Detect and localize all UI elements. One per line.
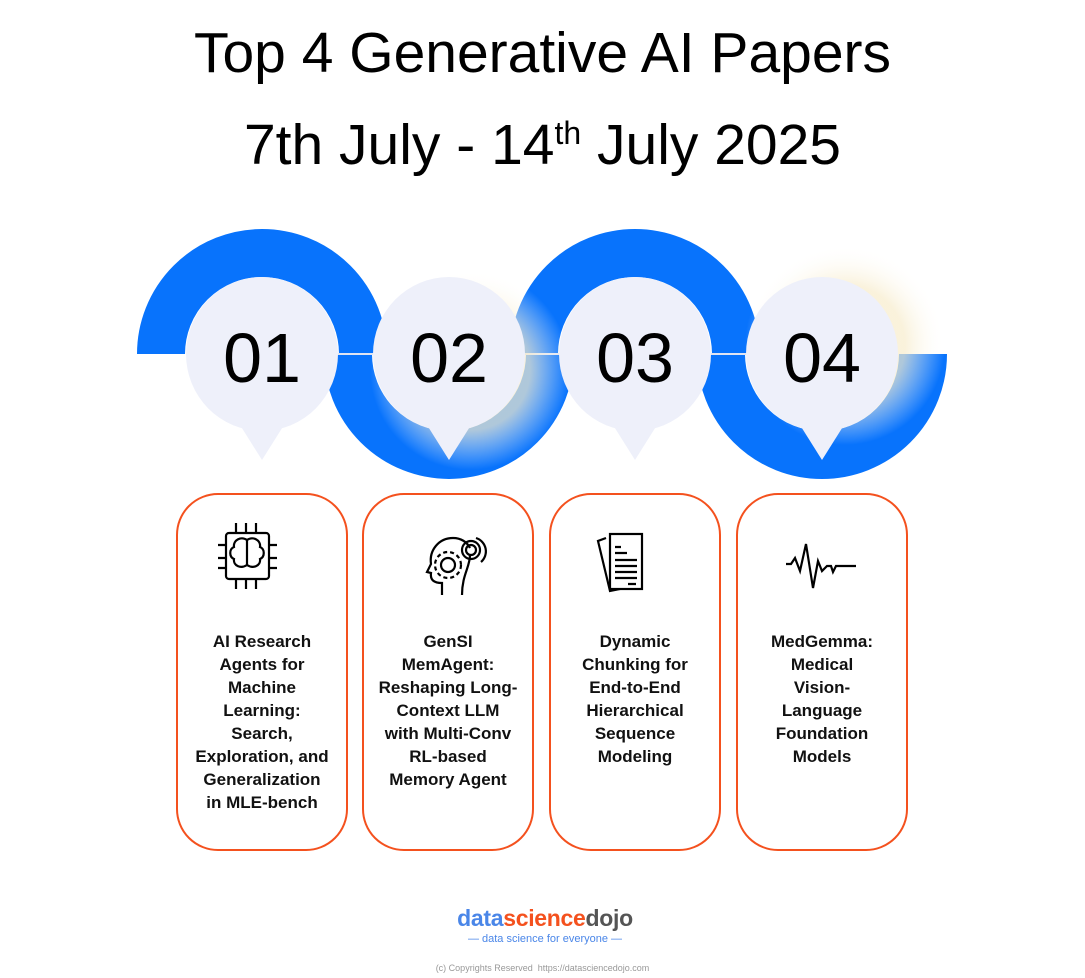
text 2: Reshaping Long- — [379, 678, 517, 697]
bubble 1 — [186, 277, 338, 460]
text 4: Vision- — [794, 678, 850, 697]
text 3: Dynamic — [600, 632, 670, 651]
logo — [457, 905, 633, 945]
text 3: Hierarchical — [586, 701, 684, 720]
text 4 — [771, 632, 873, 766]
text 2: Memory Agent — [389, 770, 507, 789]
text 3: Modeling — [598, 747, 672, 766]
number 01: 01 — [223, 319, 301, 397]
text 2: MemAgent: — [402, 655, 494, 674]
logo: — data science for everyone — — [468, 933, 622, 945]
text 1 — [195, 632, 329, 812]
text 4: Language — [782, 701, 862, 720]
text 4: Foundation — [776, 724, 868, 743]
text 3 — [582, 632, 688, 766]
bubble 2 — [373, 277, 525, 460]
icon: pulse line — [786, 544, 856, 588]
text 1: Exploration, and — [195, 747, 329, 766]
copyright: (c) Copyrights Reserved https://datasciencedojo.com — [436, 963, 649, 973]
title: Top 4 Generative AI Papers — [194, 21, 891, 85]
text 4: Models — [793, 747, 851, 766]
text 3: Chunking for — [582, 655, 688, 674]
text 4: Medical — [791, 655, 853, 674]
icons — [218, 523, 856, 595]
bubble 4 — [746, 277, 898, 460]
number 04: 04 — [783, 319, 861, 397]
text 2: GenSI — [423, 632, 473, 651]
text 2 — [379, 632, 517, 789]
text 1: Learning: — [223, 701, 301, 720]
card 3 — [549, 493, 721, 851]
bubble 3 — [559, 277, 711, 460]
text 3: End-to-End — [589, 678, 681, 697]
logo: datasciencedojo — [457, 905, 633, 931]
text 2: Context LLM — [397, 701, 499, 720]
card 1 — [176, 493, 348, 851]
icon: documents — [598, 534, 642, 591]
text 1: in MLE-bench — [206, 793, 318, 812]
text 1: Agents for — [220, 655, 304, 674]
subtitle: date range: 7th July - 14th July 2025 — [244, 113, 841, 177]
wave graphic — [137, 229, 947, 479]
text 1: Generalization — [203, 770, 321, 789]
text 1: AI Research — [213, 632, 311, 651]
card 2 — [362, 493, 534, 851]
text 2: with Multi-Conv — [385, 724, 511, 743]
text 4: MedGemma: — [771, 632, 873, 651]
text 1: Search, — [231, 724, 293, 743]
number 02: 02 — [410, 319, 488, 397]
text 3: Sequence — [595, 724, 675, 743]
number 03: 03 — [596, 319, 674, 397]
text 1: Machine — [228, 678, 296, 697]
card 4 — [736, 493, 908, 851]
icon: head with gear — [427, 538, 486, 595]
text 2: RL-based — [409, 747, 487, 766]
icon: AI chip brain — [218, 523, 277, 589]
